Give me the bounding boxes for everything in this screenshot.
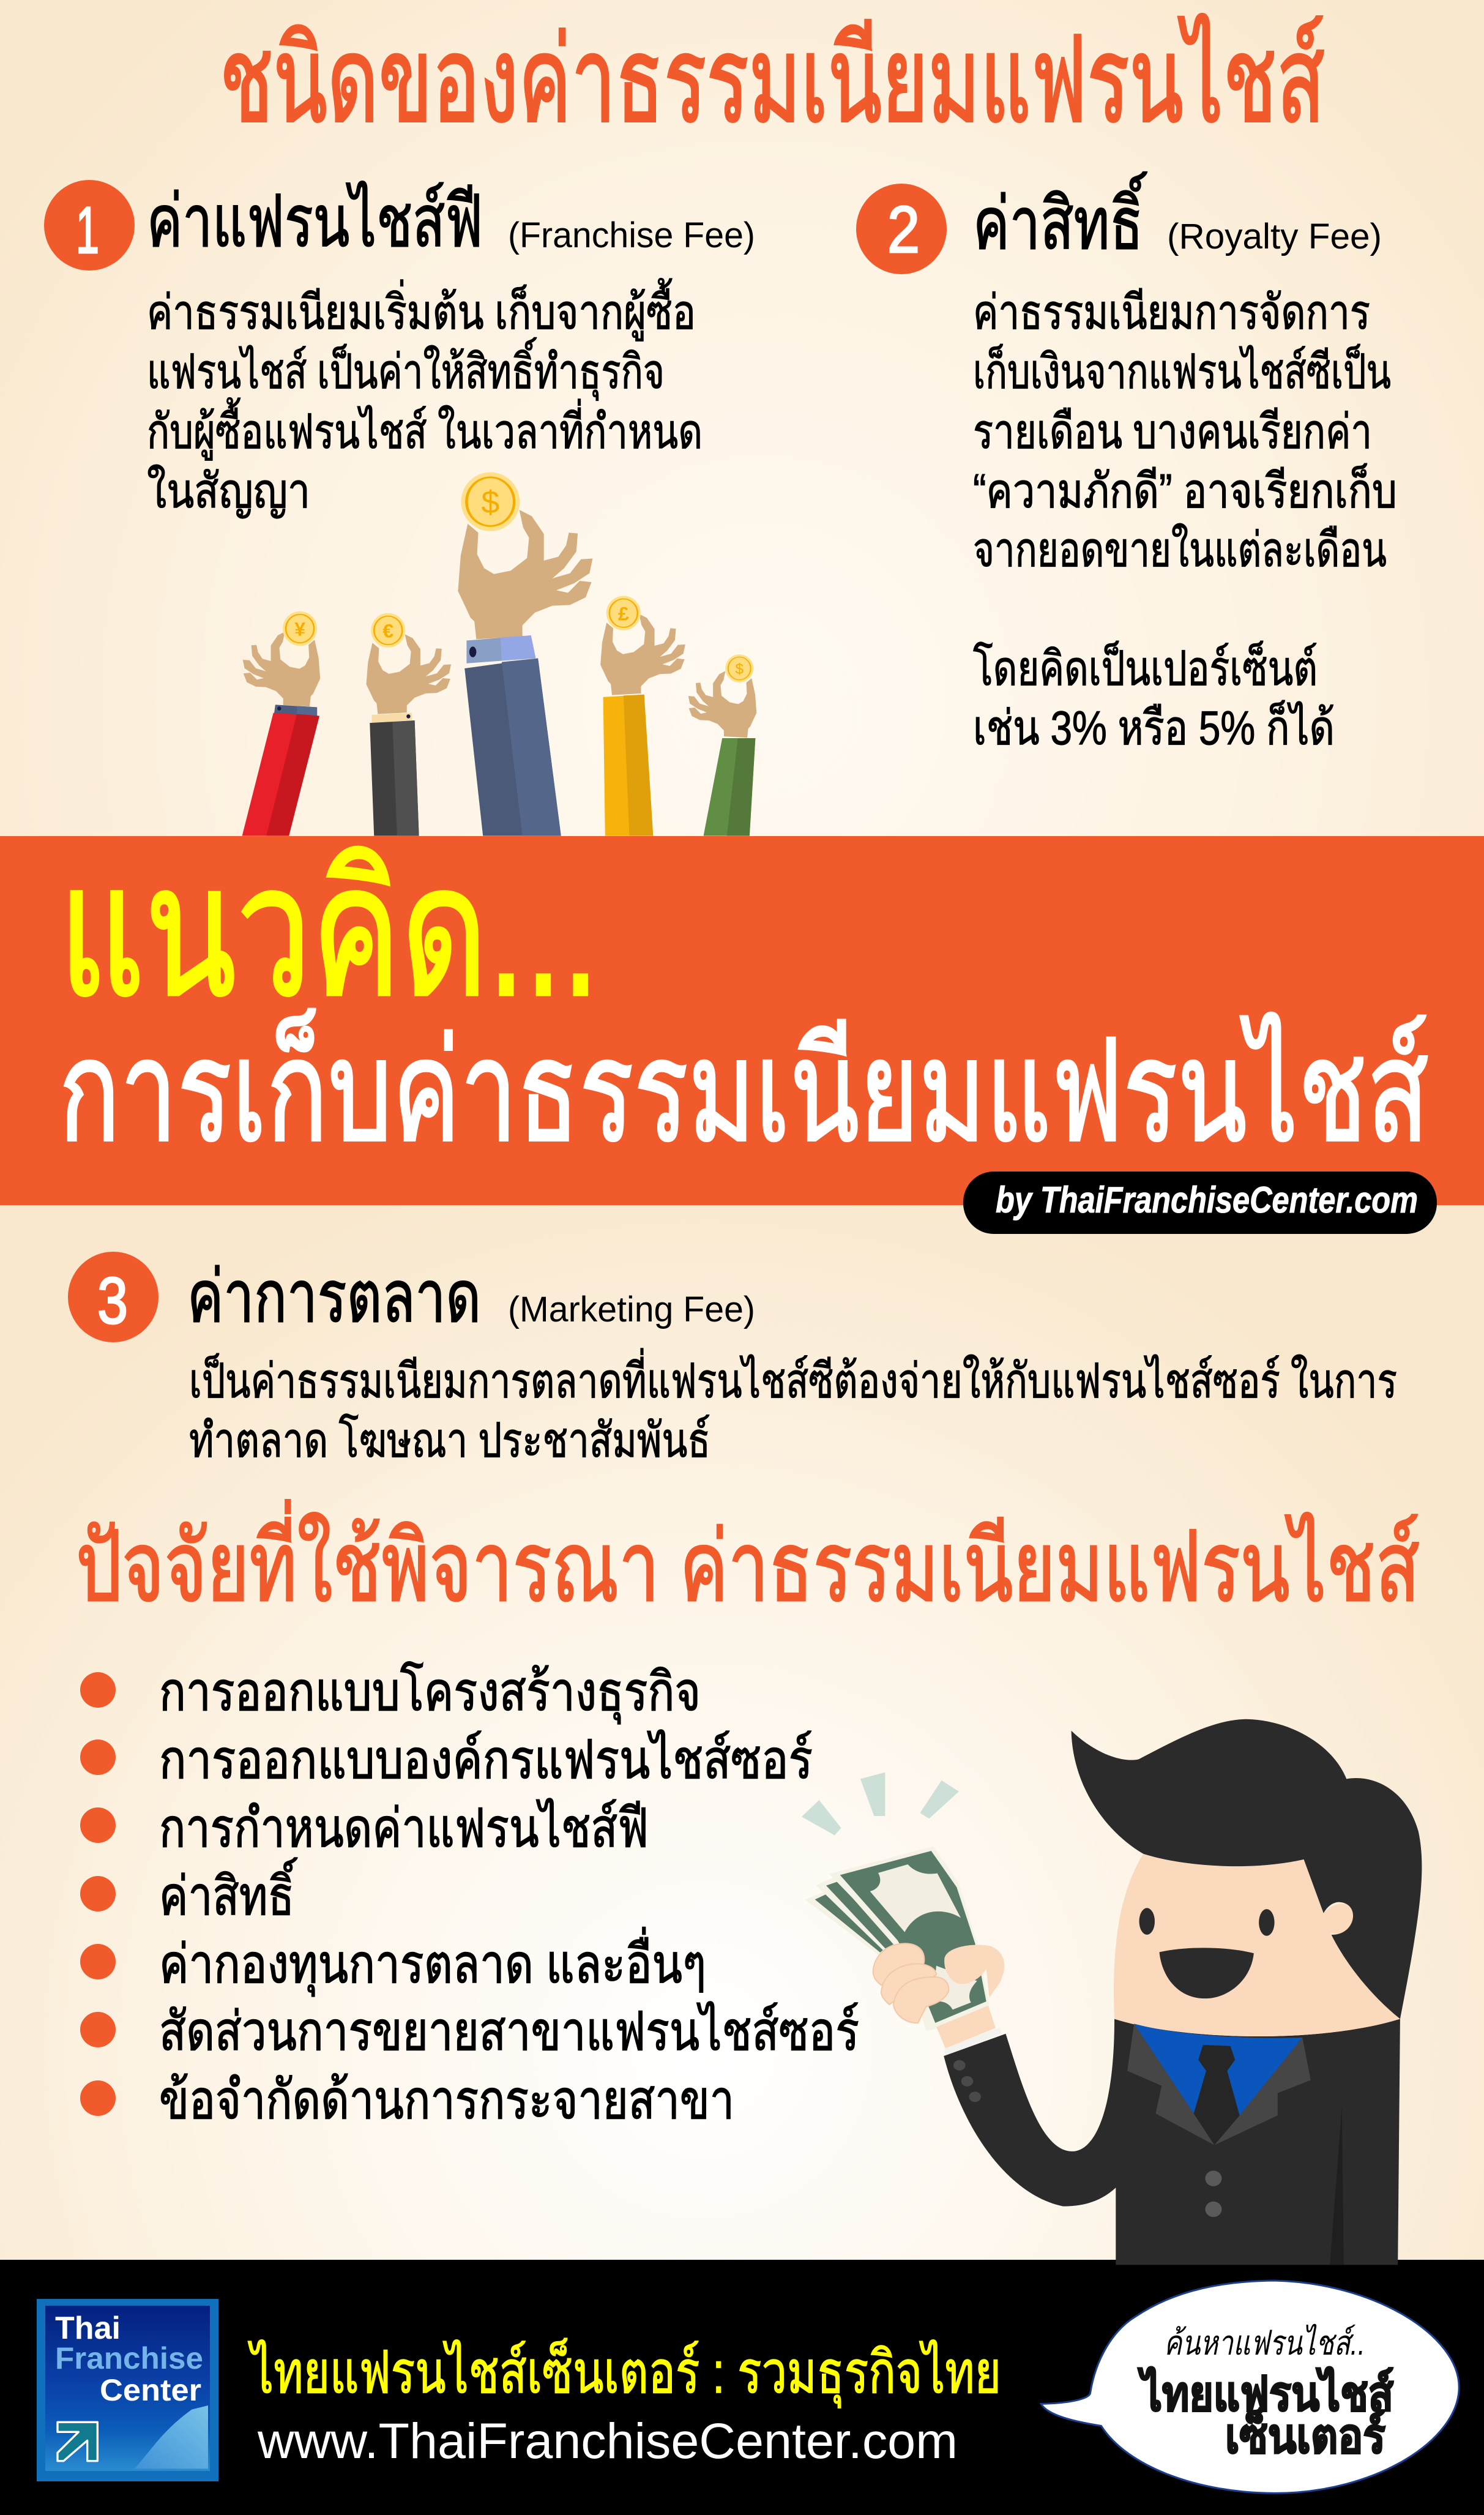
bullet list: factors: ค่าสิทธิ์ <box>159 1858 298 1926</box>
number badge 3: 3 <box>97 1263 128 1337</box>
bullet list: factors: การออกแบบโครงสร้างธุรกิจ <box>159 1661 701 1724</box>
thumb <box>944 1945 1004 1997</box>
body text: franchise fee: แฟรนไชส์ เป็นค่าให้สิทธิ์ทำธุรกิจ <box>147 337 665 401</box>
front bill <box>829 1847 990 2031</box>
illustration: hands holding coins <box>242 473 756 836</box>
red arm with yen coin: ¥ <box>294 618 305 640</box>
number badge 1 <box>44 180 135 271</box>
icon: logo arrow <box>58 2422 97 2461</box>
heading: franchise fee: ค่าแฟรนไชส์ฟี <box>147 181 483 262</box>
dark arm with euro coin: € <box>382 620 393 641</box>
illustration: fist holding money <box>805 1847 1004 2055</box>
speech bubble: ไทยแฟรนไชส์ <box>1138 2366 1393 2421</box>
wrist and shirt cuff <box>936 2006 996 2049</box>
logo: Thai Franchise Center: Thai <box>55 2311 121 2346</box>
byline pill: by ThaiFranchiseCenter.com <box>996 1179 1418 1220</box>
green arm with small dollar coin: $ <box>735 661 744 678</box>
background: lower section <box>0 1205 1484 2261</box>
face <box>1114 1854 1400 2036</box>
coat fold <box>1330 2106 1344 2265</box>
yellow arm with pound coin <box>600 596 685 836</box>
logo: Thai Franchise Center: Franchise <box>55 2341 203 2375</box>
sleeve buttons <box>953 2060 981 2102</box>
hair <box>1072 1719 1422 2019</box>
green arm with small dollar coin <box>688 654 756 836</box>
speech bubble <box>1041 2281 1459 2493</box>
banner heading line 1: แนวคิด... <box>59 828 599 1034</box>
body text: royalty fee: ค่าธรรมเนียมการจัดการ <box>973 285 1370 339</box>
illustration: money rays <box>802 1772 959 1836</box>
logo: Thai Franchise Center <box>37 2299 218 2481</box>
fingers <box>873 1943 949 2023</box>
heading: royalty fee: ค่าสิทธิ์ <box>973 172 1147 264</box>
number badge 1: 1 <box>76 193 99 267</box>
speech bubble: เซ็นเตอร์ <box>1225 2408 1385 2463</box>
suit <box>944 2019 1400 2265</box>
coat buttons <box>1205 2170 1221 2217</box>
red arm with yen coin <box>242 611 320 836</box>
back bills <box>805 1876 897 1956</box>
body text: royalty fee: โดยคิดเป็นเปอร์เซ็นต์ <box>973 641 1318 695</box>
yellow arm with pound coin: £ <box>618 603 629 624</box>
panel: royalty fee <box>856 172 1397 755</box>
body text: franchise fee <box>147 278 703 518</box>
bullet list: factors: ข้อจำกัดด้านการกระจายสาขา <box>159 2069 734 2130</box>
body text: franchise fee: ค่าธรรมเนียมเริ่มต้น เก็บจากผู้ซื้อ <box>147 278 696 341</box>
footer url: www.ThaiFranchiseCenter.com <box>257 2413 958 2469</box>
bullet list: factors <box>80 1661 859 2130</box>
speech bubble: ค้นหาแฟรนไชส์.. <box>1164 2323 1365 2362</box>
footer bar <box>0 2260 1484 2515</box>
eyes <box>1139 1908 1275 1936</box>
panel: marketing fee <box>68 1252 1397 1467</box>
logo: Thai Franchise Center: Center <box>100 2373 201 2407</box>
english label: franchise fee: (Franchise Fee) <box>508 215 755 255</box>
byline pill <box>963 1172 1437 1234</box>
bullet list: factors: สัดส่วนการขยายสาขาแฟรนไชส์ซอร์ <box>159 2001 859 2061</box>
dark arm with euro coin <box>366 613 451 836</box>
bullet list: factors: ค่ากองทุนการตลาด และอื่นๆ <box>159 1927 706 1997</box>
background: upper section <box>0 0 1484 836</box>
shirt <box>1134 2024 1302 2145</box>
body text: marketing fee: ทำตลาด โฆษณา ประชาสัมพันธ์ <box>189 1413 710 1467</box>
body text: royalty fee <box>973 285 1397 755</box>
body text: franchise fee: กับผู้ซื้อแฟรนไชส์ ในเวลาที่กำหนด <box>147 397 703 460</box>
number badge 3 <box>68 1252 158 1342</box>
tie <box>1194 2045 1240 2145</box>
heading: marketing fee: ค่าการตลาด <box>187 1257 481 1337</box>
panel: franchise fee <box>44 180 755 518</box>
mouth <box>1159 1948 1254 1998</box>
number badge 2 <box>856 184 947 274</box>
body text: franchise fee: ในสัญญา <box>147 464 310 518</box>
illustration: businessman <box>944 1719 1422 2265</box>
lapels <box>1127 2024 1311 2145</box>
body text: royalty fee: “ความภักดี” อาจเรียกเก็บ <box>973 463 1397 518</box>
blue arm with dollar coin <box>458 473 592 836</box>
bullet list: factors: การกำหนดค่าแฟรนไชส์ฟี <box>159 1798 649 1858</box>
footer tagline: ไทยแฟรนไชส์เซ็นเตอร์ : รวมธุรกิจไทย <box>248 2337 1001 2408</box>
body text: royalty fee: เช่น 3% หรือ 5% ก็ได้ <box>973 700 1335 755</box>
english label: marketing fee: (Marketing Fee) <box>508 1290 755 1329</box>
blue arm with dollar coin: $ <box>481 484 499 520</box>
ear <box>1324 1904 1358 1934</box>
orange banner <box>0 828 1484 1205</box>
bullet list: factors: การออกแบบองค์กรแฟรนไชส์ซอร์ <box>159 1729 813 1790</box>
english label: royalty fee: (Royalty Fee) <box>1167 217 1382 256</box>
body text: royalty fee: รายเดือน บางคนเรียกค่า <box>973 405 1372 458</box>
body text: marketing fee <box>189 1348 1397 1467</box>
number badge 2: 2 <box>887 192 920 266</box>
